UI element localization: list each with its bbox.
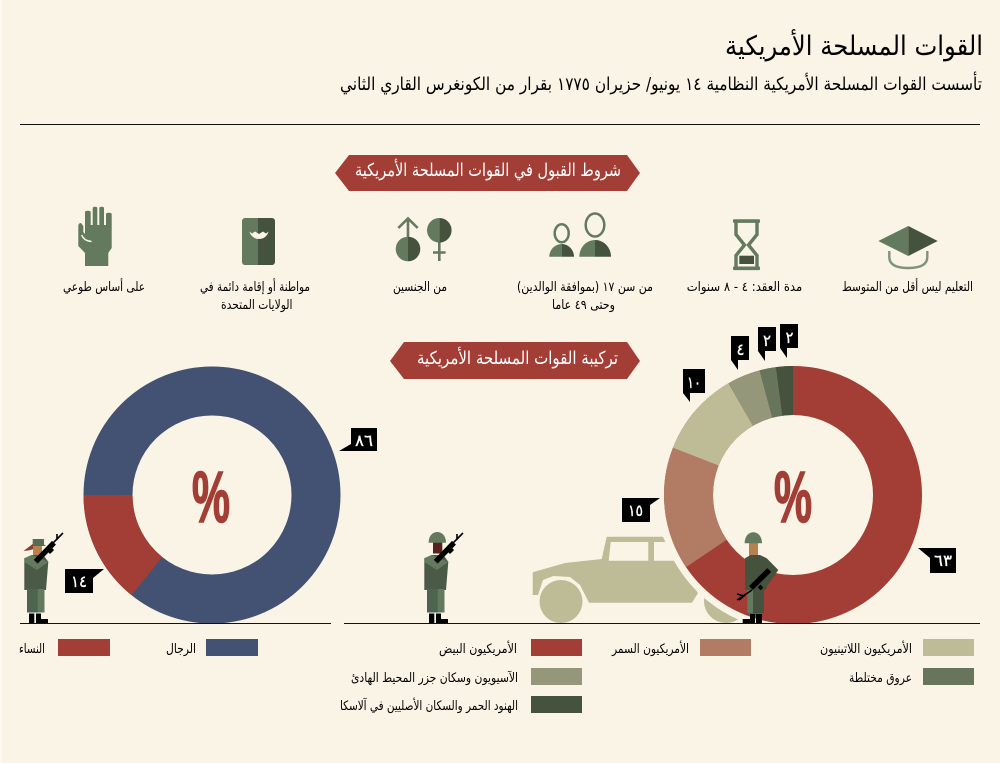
requirement: age: من سن ١٧ (بموافقة الوالدين) bbox=[517, 280, 653, 295]
requirement: both sexes bbox=[393, 218, 452, 295]
donut chart: race and ethnicity bbox=[648, 350, 938, 640]
legend: race and ethnicity: عروق مختلطة bbox=[849, 671, 912, 686]
soldier: woman bbox=[24, 533, 63, 623]
legend: race and ethnicity: الآسيويون وسكان جزر المحيط الهادئ bbox=[351, 670, 518, 686]
requirement: citizenship: الولايات المتحدة bbox=[221, 298, 292, 313]
ribbon heading: composition bbox=[390, 342, 640, 379]
callout: 14 bbox=[65, 569, 104, 593]
ribbon heading: admission requirements: شروط القبول في القوات المسلحة الأمريكية bbox=[355, 159, 621, 181]
ribbon heading: admission requirements bbox=[335, 155, 640, 191]
callout: 2 bbox=[780, 324, 798, 358]
legend: race and ethnicity: الأمريكيون البيض bbox=[439, 640, 517, 657]
requirement: education: التعليم ليس أقل من المتوسط bbox=[842, 278, 973, 295]
percent sign: % bbox=[192, 458, 230, 538]
soldier: saluting with rifle bbox=[424, 532, 463, 623]
requirement: citizenship: مواطنة أو إقامة دائمة في bbox=[200, 278, 310, 295]
icon: vehicle bbox=[533, 537, 748, 623]
callout: 4 bbox=[731, 336, 749, 370]
requirement: education bbox=[842, 226, 973, 295]
callout: 63 bbox=[918, 548, 956, 573]
legend: race and ethnicity: الهنود الحمر والسكان الأصليين في آلاسكا bbox=[340, 697, 518, 714]
icon: graduation cap bbox=[878, 226, 938, 268]
callout: 63: ٦٣ bbox=[934, 551, 952, 570]
requirement: contract duration: مدة العقد: ٤ - ٨ سنوات bbox=[687, 280, 802, 295]
ground line left bbox=[20, 622, 331, 624]
callout: 15: ١٥ bbox=[628, 501, 643, 520]
callout: 2: ٢ bbox=[763, 331, 771, 350]
requirement: contract duration bbox=[687, 219, 802, 295]
icon: gender symbols bbox=[396, 218, 452, 261]
callout: 10 bbox=[683, 369, 705, 402]
callout: 4: ٤ bbox=[736, 340, 744, 359]
callout: 14: ١٤ bbox=[71, 572, 87, 591]
legend: gender: النساء bbox=[19, 642, 45, 657]
requirement: voluntary bbox=[63, 207, 145, 295]
requirement: age bbox=[517, 214, 653, 313]
icon: two people bbox=[549, 214, 611, 257]
callout: 2 bbox=[758, 327, 776, 361]
requirement: citizenship bbox=[200, 218, 310, 313]
soldier: rifle across body bbox=[737, 532, 778, 623]
callout: 10: ١٠ bbox=[687, 373, 701, 392]
icon: passport bbox=[242, 218, 275, 265]
percent sign: % bbox=[774, 458, 812, 538]
ground line right bbox=[344, 622, 980, 624]
callout: 86: ٨٦ bbox=[355, 431, 373, 450]
requirement: voluntary: على أساس طوعي bbox=[63, 278, 145, 295]
legend: gender bbox=[19, 639, 258, 657]
legend: race and ethnicity bbox=[340, 639, 974, 714]
callout: 15 bbox=[622, 498, 660, 522]
requirement: both sexes: من الجنسين bbox=[393, 280, 447, 295]
callout: 2: ٢ bbox=[786, 328, 794, 347]
legend: race and ethnicity: الأمريكيون اللاتينيون bbox=[820, 640, 912, 657]
icon: hourglass bbox=[733, 219, 760, 270]
ribbon heading: composition: تركيبة القوات المسلحة الأمريكية bbox=[417, 347, 618, 369]
legend: gender: الرجال bbox=[166, 642, 196, 657]
legend: race and ethnicity: الأمريكيون السمر bbox=[611, 640, 689, 657]
icon: raised hand bbox=[78, 207, 112, 266]
donut chart: gender bbox=[66, 349, 358, 641]
requirement: age: وحتى ٤٩ عاما bbox=[552, 298, 615, 313]
callout: 86 bbox=[339, 428, 377, 451]
